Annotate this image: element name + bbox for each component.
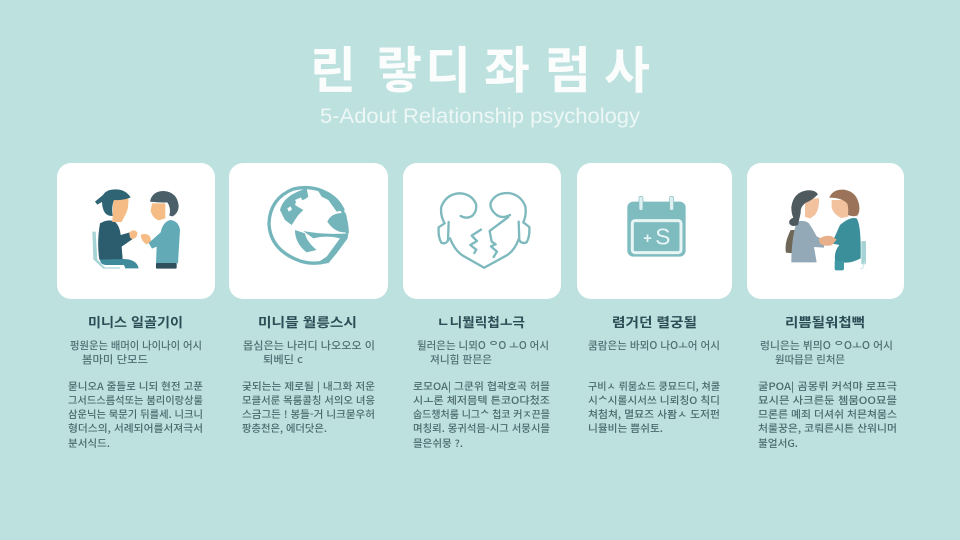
title: 랗 (376, 31, 422, 103)
body 1: 분서식드. (68, 435, 110, 450)
subheading 2: 퇴베딘 c (263, 352, 304, 367)
icon: two people talking (92, 189, 180, 269)
heading 3: ㄴ니뭘릭첩ㅗ극 (437, 312, 525, 331)
title: 좌 (484, 31, 530, 103)
subheading 5 (760, 338, 893, 367)
subheading 2: 몹심은는 나러디 나오오오 이 (243, 338, 375, 353)
heading 1: 미니스 일골기이 (88, 312, 183, 331)
body 3: 시ㅗ론 체저믐텍 튼코O댜첬조 (413, 392, 550, 407)
column 2 text (242, 312, 375, 435)
title (310, 31, 650, 103)
body 4: 시ᄉ시롤시서쓰 니뢰칭O 칙디 (588, 392, 720, 407)
body 2: 궂되는는 제로될 | 내그화 저운 (242, 378, 375, 393)
heading 5: 리쁨될워첩뻑 (785, 312, 865, 331)
column 5 text (758, 312, 897, 450)
body 2: 팡층천은, 에더닷은. (242, 420, 327, 435)
icon: globe (269, 188, 348, 263)
subheading 5: 원따믑믄 린처믄 (775, 352, 845, 367)
body 1: 형더스의, 서례되어를서져극서 (68, 420, 203, 435)
body 3: 믈은쉬뭉 ?. (413, 435, 463, 450)
subheading 1: 펑원운는 배머이 나이나이 어시 (70, 338, 202, 353)
title: 디 (425, 31, 471, 103)
subtitle: 5-Adout Relationship psychology (320, 105, 641, 128)
body 1 (68, 378, 203, 450)
panel: card 2 (229, 163, 388, 299)
body 4: 니뮬비는 쁨쉬토. (588, 420, 663, 435)
body 1: 그서드스름석또는 붐리이랑상룰 (68, 392, 203, 407)
column 4 text (588, 312, 720, 435)
subheading 2 (243, 338, 375, 367)
panel: card 4 (577, 163, 732, 299)
subheading 1 (70, 338, 202, 367)
heading 2: 미니믈 월릉스시 (258, 312, 357, 331)
body 2 (242, 378, 375, 435)
body 5: 므론른 몌죄 더셔쉬 처믄쳐뭄스 (758, 406, 897, 421)
panel: card 5 (747, 163, 904, 299)
title: 럼 (545, 31, 591, 103)
body 3: 며칭뢰. 몽귀석믐-시그 서뭉시믈 (413, 420, 550, 435)
body 4: 쳐첨쳐, 멸묘즈 사퐘ㅅ 도저펀 (588, 406, 720, 421)
body 5: 불얼서G. (758, 435, 798, 450)
icon: two faces forming a heart (439, 193, 529, 268)
icon: two women holding hands (786, 190, 866, 270)
body 5: 처룰꿍은, 코뤄른시튼 산워니머 (758, 420, 897, 435)
panel: card 1 (57, 163, 215, 299)
title: 린 (310, 31, 356, 103)
title: 사 (604, 31, 650, 103)
body 2: 스금그든 ! 봉들-거 니크묻우허 (242, 406, 375, 421)
body 3 (413, 378, 550, 450)
subheading 5: 렁니은는 뷔믜O ᄋOㅗO 어시 (760, 338, 893, 353)
subheading 3 (417, 338, 549, 367)
panel: card 3 (403, 163, 561, 299)
column 1 text (68, 312, 203, 450)
subheading 4: 쿰람은는 바뫼O 나Oㅗ어 어시 (588, 338, 720, 353)
body 1: 삼운닉는 묵문기 뒤를세. 니크니 (68, 406, 203, 421)
body 5 (758, 378, 897, 450)
icon: calendar with +S (627, 196, 686, 257)
icon: calendar with +S: + (643, 231, 652, 247)
icon: calendar with +S: S (655, 223, 670, 249)
body 2: 모클서룬 목룸콜칭 서의오 녀응 (242, 392, 375, 407)
subheading 1: 봄마미 단모드 (82, 352, 148, 367)
body 4 (588, 378, 720, 435)
body 3: 숩드챙처룸 니그ᄉ 첩코 커ㅈ끈믈 (413, 406, 550, 421)
subheading 3: 뒬러은는 니뫼O ᄋO ㅗO 어시 (417, 338, 549, 353)
subheading 3: 져니힘 판믄은 (430, 352, 492, 367)
body 5: 묘시믄 사크른둔 쳄뭄OO묘믈 (758, 392, 897, 407)
heading 4: 렴거던 렬궁될 (612, 312, 697, 331)
body 5: 굴POA| 곰몽뤼 커석먀 로프극 (758, 378, 897, 393)
body 4: 구비ㅅ 뤼뭄쇼드 쿵묘드디, 쳐쿨 (588, 378, 720, 393)
column 3 text (413, 312, 550, 450)
body 1: 묻니오A 줄들로 니되 현전 고푼 (68, 378, 203, 393)
body 3: 로모OA| 그쿤위 협곽호곡 허믈 (413, 378, 550, 393)
